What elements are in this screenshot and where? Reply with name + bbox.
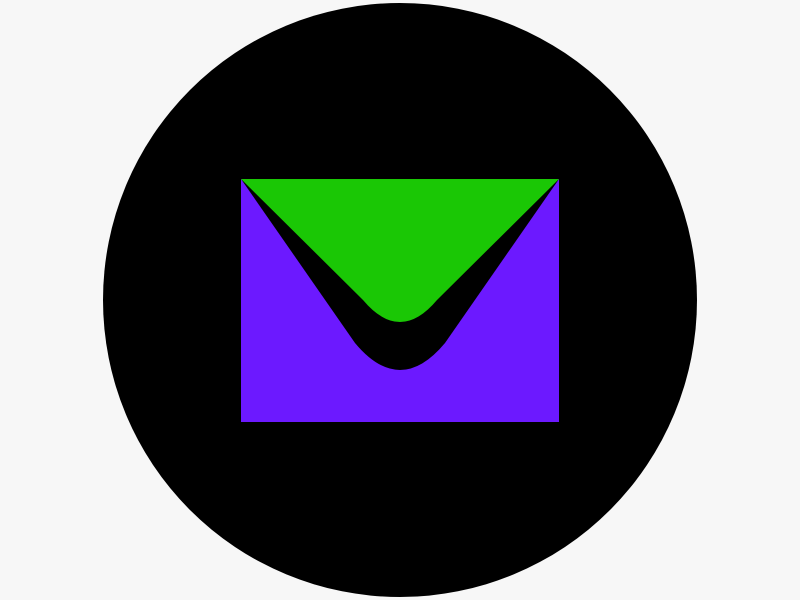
black circle background — [103, 3, 697, 597]
green flap — [241, 179, 559, 322]
envelope — [241, 179, 559, 422]
envelope body — [241, 179, 559, 422]
flap shadow — [241, 179, 559, 370]
